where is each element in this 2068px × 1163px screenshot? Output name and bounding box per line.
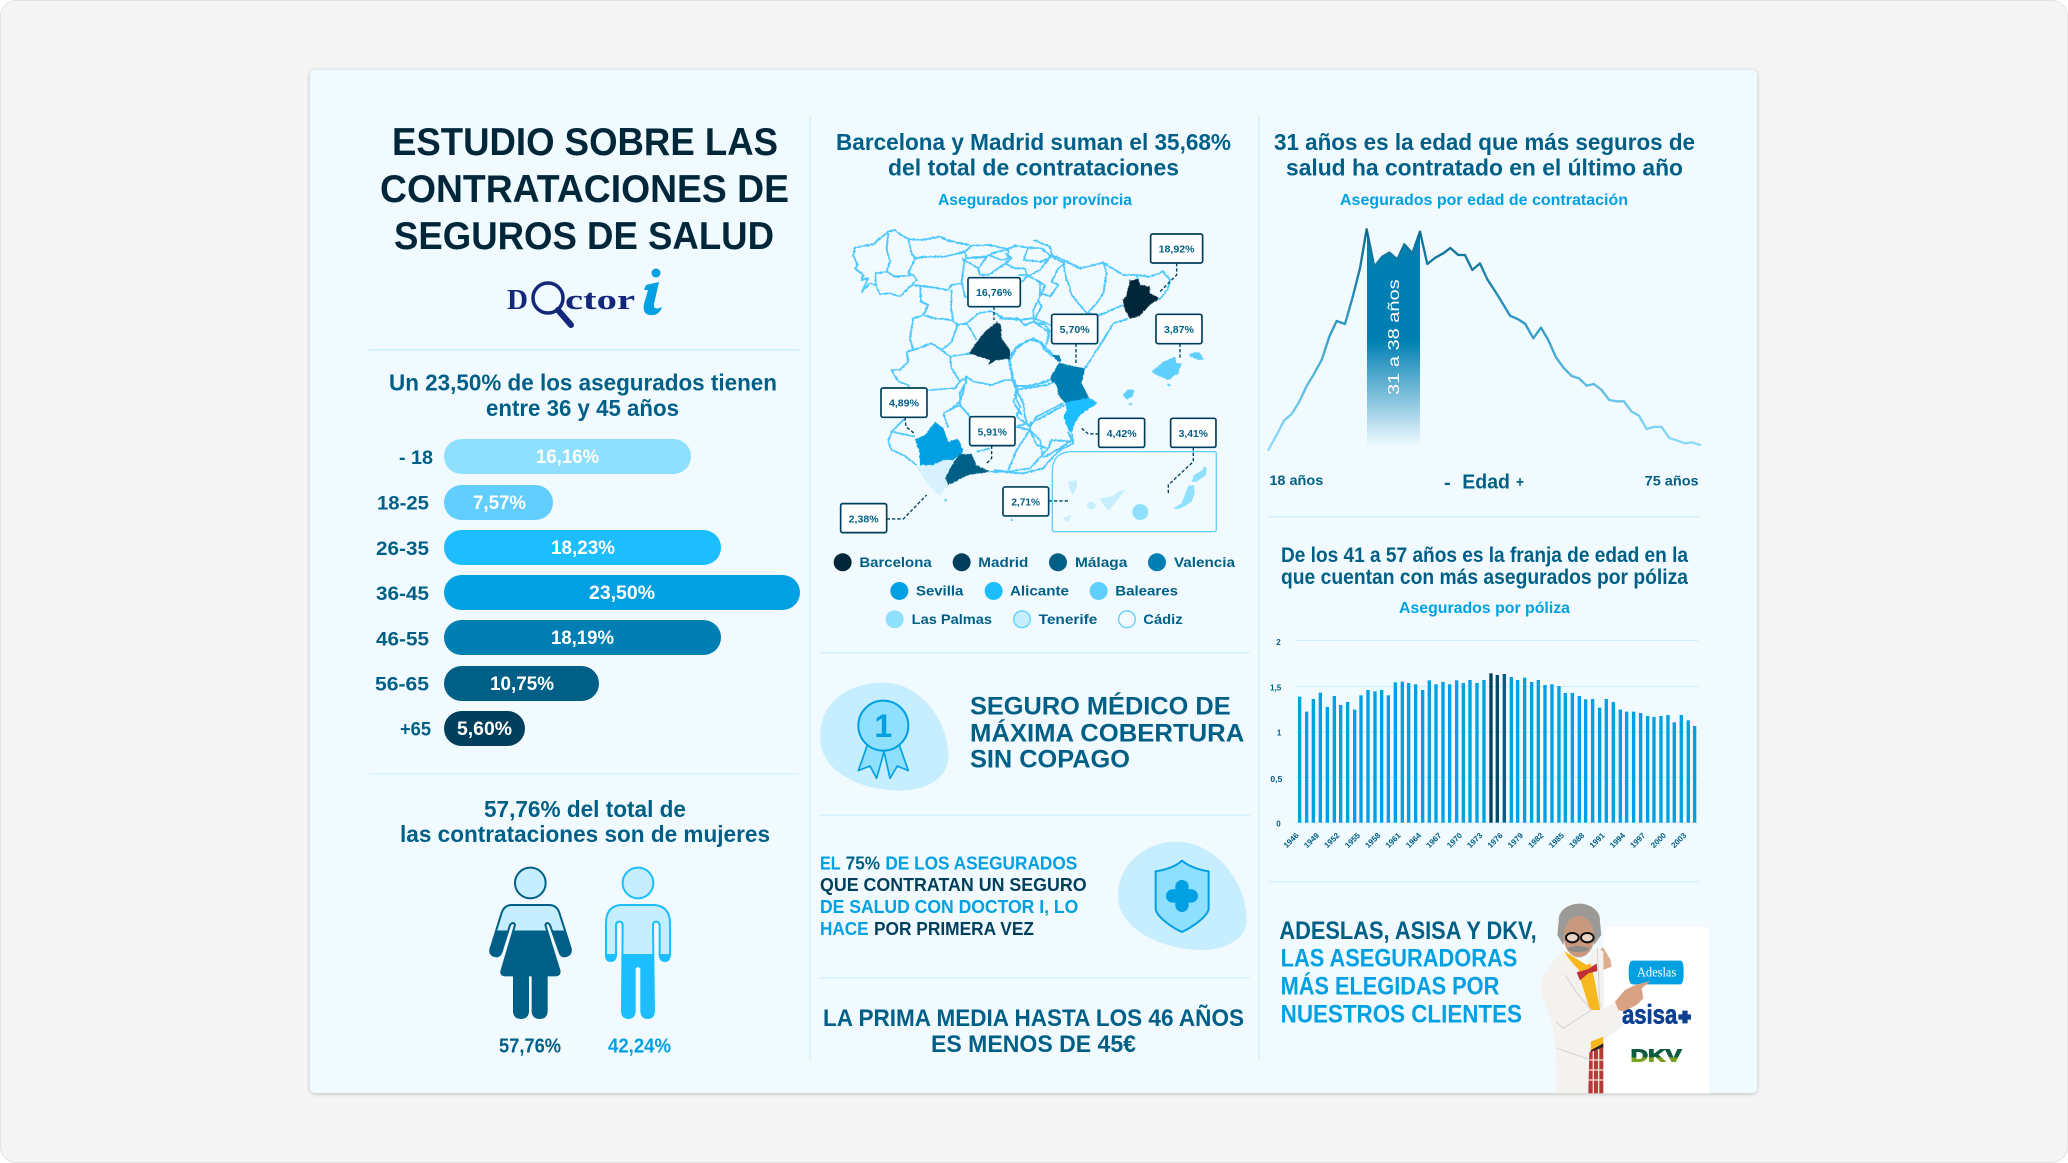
callout: Málaga <box>970 417 1015 446</box>
heading: age distribution <box>389 370 777 421</box>
age line <box>1268 229 1700 450</box>
panel: middle column callouts <box>820 683 1247 950</box>
axis labels: 75 años <box>1645 474 1699 489</box>
Ceuta and Melilla <box>944 499 1013 521</box>
bar: 56-65: 10,75% <box>490 674 554 695</box>
year labels: 1955 <box>1343 831 1362 850</box>
bar: 18-25 <box>377 485 553 520</box>
men percentage: 42,24% <box>608 1036 671 1058</box>
year labels: 1982 <box>1526 831 1546 850</box>
icon: man <box>606 868 670 1018</box>
year labels: 1991 <box>1588 831 1607 850</box>
province: Cádiz <box>917 460 954 496</box>
bar: under 18: - 18 <box>399 448 433 469</box>
callout: Las Palmas <box>1171 418 1216 447</box>
logo: Doctor i: ctor <box>565 284 635 316</box>
year labels: 1979 <box>1506 831 1525 850</box>
Canary Islands inset <box>1052 452 1216 532</box>
y axis labels: 1,5 <box>1270 684 1282 693</box>
map legend: Barcelona <box>859 555 932 570</box>
bar: 36-45: 23,50% <box>589 583 655 604</box>
text: maximum coverage <box>970 692 1244 774</box>
text: 75% first-time buyers: DE LOS ASEGURADOS <box>885 852 1077 873</box>
callout: Valencia: 5,70% <box>1060 325 1090 336</box>
year labels: 1946 <box>1282 831 1301 850</box>
heading: Barcelona and Madrid <box>836 129 1231 180</box>
map legend: Madrid <box>978 555 1028 570</box>
year labels: 1961 <box>1384 831 1403 850</box>
map legend: Sevilla <box>916 584 964 599</box>
text: 75% first-time buyers: DE SALUD CON DOCTOR I, LO <box>820 896 1078 917</box>
figure: doctor pointing <box>1541 904 1651 1093</box>
callout: Cádiz: 2,38% <box>849 514 879 525</box>
map legend: Las Palmas <box>912 612 992 627</box>
text: 75% first-time buyers: 75% <box>846 852 880 873</box>
y axis labels: 2 <box>1276 638 1281 647</box>
text: most chosen insurers: MÁS ELEGIDAS POR <box>1281 973 1499 1001</box>
year labels <box>1282 831 1689 850</box>
text: maximum coverage: MÁXIMA COBERTURA <box>970 719 1244 747</box>
heading: Barcelona and Madrid: Barcelona y Madrid suman el 35,68% <box>836 129 1231 155</box>
icon: shield on blob <box>1118 842 1247 950</box>
callout: Baleares <box>1156 314 1202 344</box>
axis labels: + <box>1516 474 1524 491</box>
province: Madrid <box>969 322 1010 365</box>
year labels: 1952 <box>1322 831 1342 850</box>
bar: 46-55 <box>376 620 721 655</box>
year labels: 1964 <box>1404 831 1423 850</box>
callout: Baleares: 3,87% <box>1164 325 1194 336</box>
text: most chosen insurers: ADESLAS, ASISA Y DKV, <box>1279 918 1537 945</box>
band label: 31 a 38 años <box>1386 279 1403 395</box>
icon: medal on blob <box>820 683 948 791</box>
title: SEGUROS DE SALUD <box>394 215 774 258</box>
callout: Barcelona: 18,92% <box>1159 245 1195 256</box>
subheading: age of contract: Asegurados por edad de contratación <box>1340 192 1628 209</box>
callout: Barcelona <box>1151 234 1203 263</box>
callout: Madrid: 16,76% <box>976 288 1012 299</box>
bar: 36-45: 36-45 <box>376 584 429 605</box>
map legend: Tenerife <box>1039 612 1098 627</box>
bar: 56-65: 56-65 <box>375 674 429 696</box>
bar: under 18: 16,16% <box>536 447 599 468</box>
callout: Las Palmas: 3,41% <box>1179 429 1208 440</box>
heading: 31 years <box>1274 129 1695 180</box>
filled provinces <box>915 279 1159 496</box>
title: ESTUDIO SOBRE LAS <box>392 121 778 164</box>
year labels: 1970 <box>1445 831 1464 850</box>
text: 75% first-time buyers: EL <box>820 852 841 873</box>
axis labels: - <box>1444 471 1451 492</box>
bar: over 65: 5,60% <box>457 719 512 740</box>
subheading: province: Asegurados por província <box>938 192 1132 209</box>
logo: Doctor i <box>507 268 662 325</box>
bar: 26-35 <box>376 530 721 565</box>
province: Sevilla <box>915 422 963 465</box>
callout: Alicante: 4,42% <box>1107 429 1137 440</box>
y axis labels: 0,5 <box>1270 775 1283 784</box>
heading: age distribution: Un 23,50% de los asegurados tienen <box>389 370 777 396</box>
year labels: 1958 <box>1363 831 1383 850</box>
heading: women share: 57,76% del total de <box>484 796 686 822</box>
year labels: 1985 <box>1547 831 1566 850</box>
heading: women share: las contrataciones son de mujeres <box>400 821 770 847</box>
text: 75% first-time buyers: QUE CONTRATAN UN SEGURO <box>820 874 1087 895</box>
callout: Alicante <box>1099 418 1145 447</box>
map legend: Baleares <box>1115 584 1178 599</box>
map legend: Cádiz <box>1143 612 1183 627</box>
text: 75% first-time buyers: HACE <box>820 918 869 939</box>
bar: 18-25: 18-25 <box>377 494 429 514</box>
map legend: Valencia <box>1174 555 1235 570</box>
year labels: 1988 <box>1567 831 1587 850</box>
Balearic islands <box>1123 352 1204 405</box>
callout: Cádiz <box>841 504 887 533</box>
map legend <box>834 553 1235 628</box>
map legend: Málaga <box>1075 555 1128 570</box>
bar chart: insured by age range <box>375 439 800 746</box>
heading: 41 to 57 <box>1281 543 1689 589</box>
province: Barcelona <box>1123 279 1159 318</box>
heading: 31 years: 31 años es la edad que más seguros de <box>1274 129 1695 155</box>
callout: Tenerife <box>1003 487 1049 516</box>
title <box>380 121 789 258</box>
callout: Tenerife: 2,71% <box>1011 498 1040 509</box>
y axis labels <box>1270 638 1283 828</box>
heading: 41 to 57: De los 41 a 57 años es la franja de edad en la <box>1281 543 1689 567</box>
title: CONTRATACIONES DE <box>380 168 789 211</box>
text: most chosen insurers: NUESTROS CLIENTES <box>1281 1002 1522 1029</box>
logo: Adeslas <box>1629 961 1684 984</box>
heading: 41 to 57: que cuentan con más asegurados por póliza <box>1281 565 1689 589</box>
bars <box>1298 673 1696 823</box>
year labels: 2003 <box>1669 831 1689 850</box>
axis labels: Edad <box>1462 471 1510 493</box>
year labels: 1949 <box>1302 831 1321 850</box>
year labels: 2000 <box>1649 831 1668 850</box>
province: Valencia <box>1050 355 1089 403</box>
year labels: 1973 <box>1465 831 1485 850</box>
heading: age distribution: entre 36 y 45 años <box>486 395 679 421</box>
line chart: insured by contract age <box>1268 229 1700 493</box>
text: average premium: LA PRIMA MEDIA HASTA LOS 46 AÑOS <box>823 1004 1244 1032</box>
callout: Madrid <box>968 278 1020 307</box>
y axis labels: 0 <box>1276 819 1281 828</box>
text: maximum coverage: SEGURO MÉDICO DE <box>970 692 1231 720</box>
callout: Sevilla <box>881 388 927 417</box>
axis labels: 18 años <box>1269 473 1324 488</box>
map outline <box>853 230 1170 473</box>
callout: Sevilla: 4,89% <box>889 399 919 410</box>
bar: 46-55: 46-55 <box>376 630 429 650</box>
bar chart: insured per policy <box>1270 638 1698 850</box>
text: 75% first-time buyers: POR PRIMERA VEZ <box>874 918 1034 939</box>
province: Málaga <box>945 454 990 485</box>
map legend: Alicante <box>1010 584 1069 599</box>
women percentage: 57,76% <box>499 1036 561 1058</box>
text: most chosen insurers <box>1279 918 1537 1029</box>
year labels: 1976 <box>1486 831 1505 850</box>
logo: Doctor i: D <box>507 284 528 316</box>
y axis labels: 1 <box>1277 729 1282 738</box>
bar: over 65: +65 <box>400 720 431 740</box>
highlight band: 31 to 38 <box>1367 229 1420 447</box>
province: Alicante <box>1063 398 1098 433</box>
panel: insurers <box>1279 904 1709 1093</box>
year labels: 1997 <box>1628 831 1648 850</box>
white logo card <box>1604 927 1709 1093</box>
axis labels <box>1269 471 1699 493</box>
bar: over 65 <box>400 711 525 746</box>
logo: Asisa: asisa <box>1622 999 1677 1029</box>
icon: medal on blob: 1 <box>874 708 892 744</box>
text: maximum coverage: SIN COPAGO <box>970 747 1130 774</box>
year labels: 1967 <box>1424 831 1444 850</box>
heading: 31 years: salud ha contratado en el último año <box>1286 154 1683 180</box>
bar: under 18 <box>399 439 691 474</box>
gender figures <box>490 868 670 1018</box>
heading: Barcelona and Madrid: del total de contrataciones <box>888 154 1179 180</box>
year labels: 1994 <box>1608 831 1627 850</box>
map of Spain <box>834 230 1235 628</box>
bar: 26-35: 18,23% <box>551 538 615 559</box>
text: average premium: ES MENOS DE 45€ <box>931 1031 1136 1058</box>
logo: Adeslas: Adeslas <box>1637 965 1676 980</box>
bar: 26-35: 26-35 <box>376 539 429 560</box>
leader lines <box>887 263 1193 519</box>
callout: Valencia <box>1052 314 1098 344</box>
bar: 36-45 <box>376 575 800 610</box>
text: most chosen insurers: LAS ASEGURADORAS <box>1281 946 1517 973</box>
text: 75% first-time buyers <box>820 852 1087 939</box>
icon: woman <box>490 868 571 1018</box>
heading: women share <box>400 796 770 847</box>
subheading: per policy: Asegurados por póliza <box>1399 600 1570 617</box>
bar: 18-25: 7,57% <box>473 493 526 514</box>
callout: Málaga: 5,91% <box>978 427 1007 438</box>
logo: DKV: DKV <box>1631 1046 1682 1066</box>
bar: 56-65 <box>375 666 599 701</box>
text: average premium <box>823 1004 1244 1058</box>
infographic card <box>310 70 1757 1093</box>
bar: 46-55: 18,19% <box>551 628 614 649</box>
